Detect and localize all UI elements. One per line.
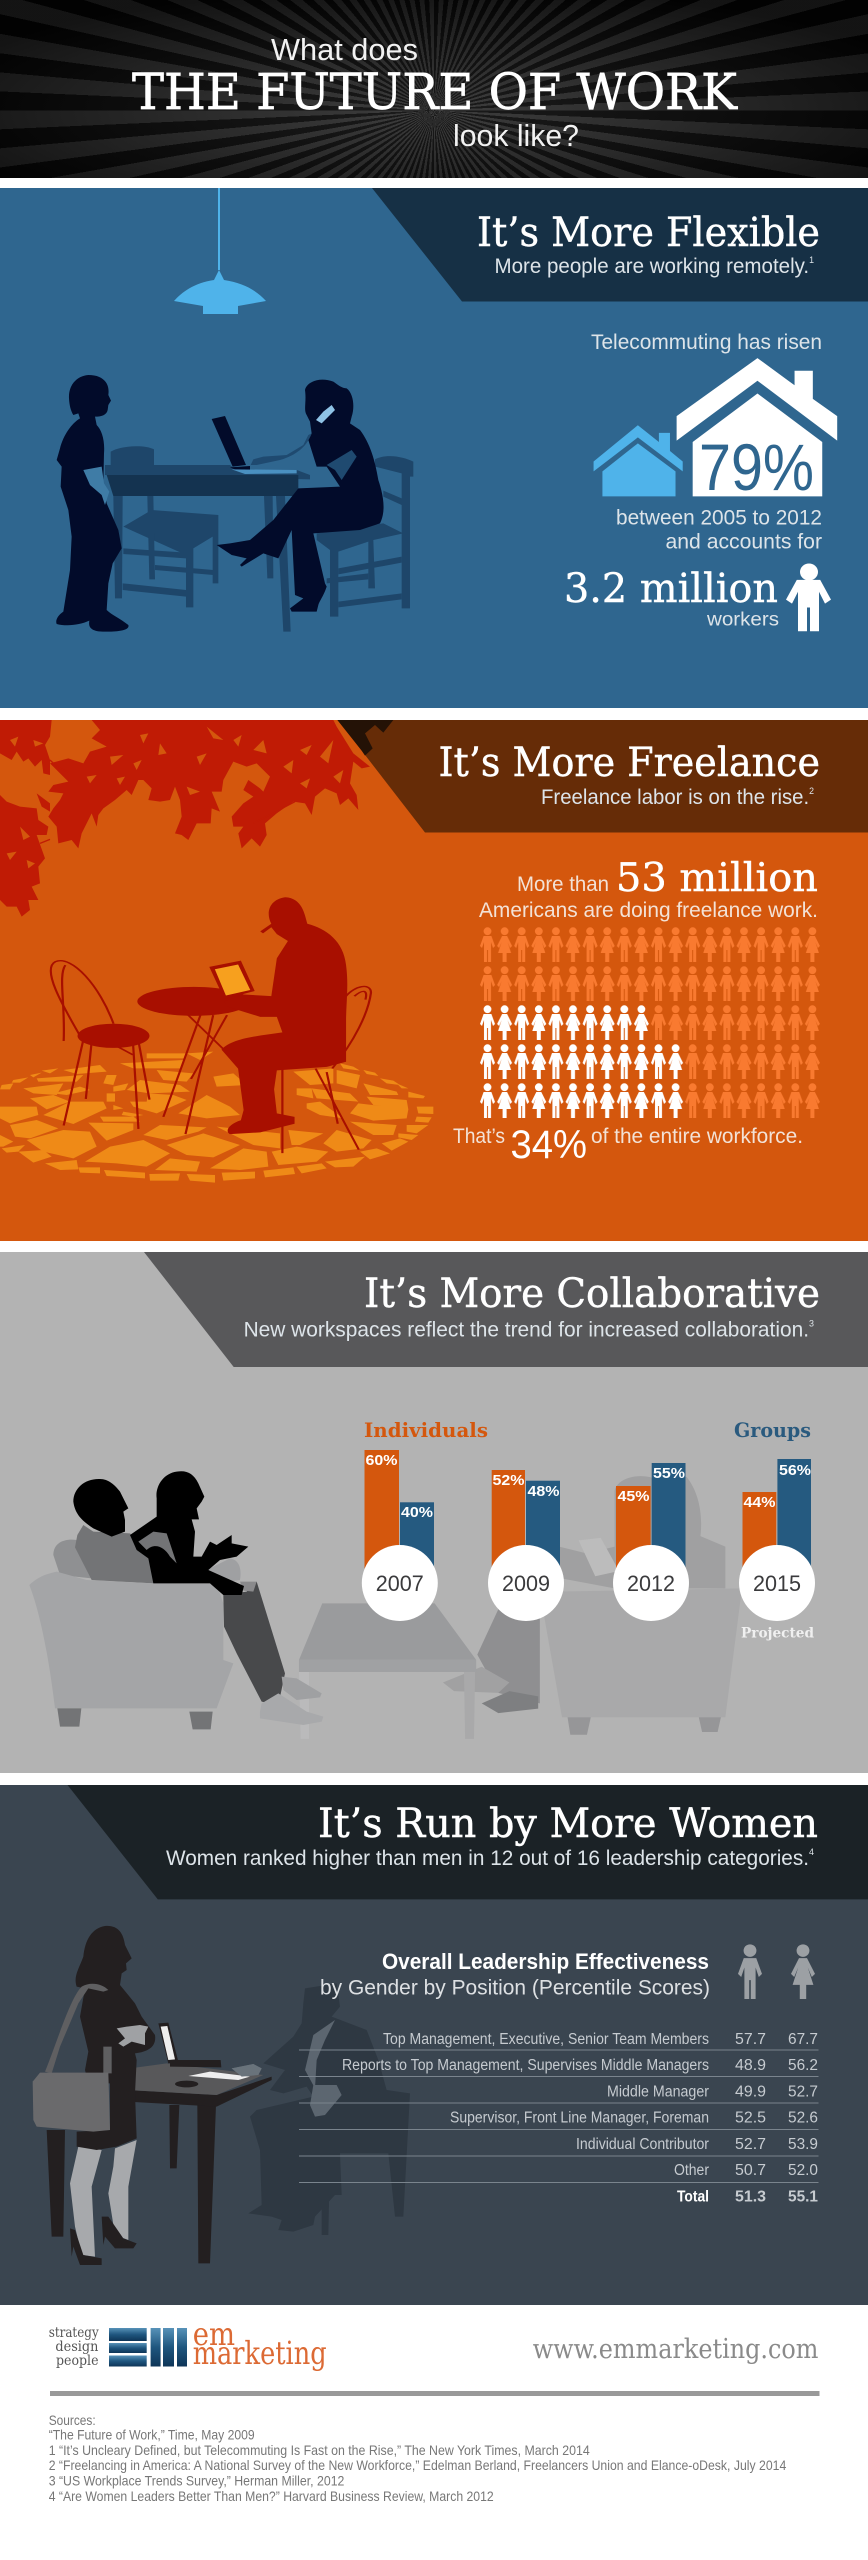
bars: 2015: 56% <box>779 1462 811 1479</box>
text: accounts for: and accounts for <box>666 530 822 554</box>
illustration: coffee table <box>299 1603 476 1739</box>
panel: run by more women <box>0 1785 868 2305</box>
panel: more freelance <box>0 720 868 1241</box>
chart: individuals vs groups <box>362 1418 815 1642</box>
bars: 2012: 55% <box>653 1465 685 1482</box>
sources list: 4 “Are Women Leaders Better Than Men?” Harvard Business Review, March 2012 <box>49 2488 494 2504</box>
text: thats: That’s <box>453 1125 505 1148</box>
banner: more freelance <box>337 720 868 832</box>
sources list: Sources: <box>49 2412 96 2428</box>
row: middle manager <box>607 2083 818 2100</box>
icon: large house with percentage <box>677 358 837 504</box>
row: individual contributor: 52.7 <box>735 2136 766 2153</box>
row: reports to top management: Reports to Top Management, Supervises Middle Managers <box>342 2057 709 2074</box>
row: other: Other <box>674 2162 709 2179</box>
row: total: 51.3 <box>735 2188 766 2206</box>
table subtitle: by Gender by Position (Percentile Scores) <box>320 1976 710 1999</box>
arm of standing person <box>83 467 109 505</box>
section subtitle: 4 <box>809 1847 814 1857</box>
icon: woman <box>791 1944 815 1999</box>
bars: 2009: 48% <box>528 1483 560 1500</box>
heading line: what does: What does <box>271 32 418 67</box>
row lines <box>299 2050 818 2183</box>
text: telecommuting has risen: Telecommuting has risen <box>591 331 822 354</box>
logo: em marketing <box>49 2315 327 2372</box>
main heading: THE FUTURE OF WORK <box>132 63 739 121</box>
illustration: seated man <box>232 1983 410 2235</box>
illustration: pendant lamp <box>174 188 266 314</box>
stat: 3.2 million: 3.2 million <box>564 566 778 612</box>
icon: worker figure <box>786 564 831 631</box>
bars: 2007: 60% <box>366 1452 398 1469</box>
section subtitle: 3 <box>809 1319 814 1329</box>
label: projected: Projected <box>741 1626 814 1642</box>
stat: 53 million: 53 million <box>616 856 818 901</box>
row: individual contributor: Individual Contributor <box>576 2136 709 2153</box>
bars: 2012 <box>613 1463 689 1621</box>
row: middle manager: 49.9 <box>735 2083 766 2100</box>
icon: man <box>738 1944 762 1999</box>
row: reports to top management: 56.2 <box>788 2057 818 2074</box>
row: top management: 57.7 <box>735 2031 766 2048</box>
row: other: 50.7 <box>735 2162 766 2179</box>
laptop <box>212 416 297 474</box>
illustration: standing woman with bag <box>33 1926 155 2265</box>
logo tagline: strategy <box>49 2325 99 2341</box>
bars: 2015 <box>739 1459 815 1621</box>
banner: more collaborative <box>144 1252 868 1367</box>
illustration: desk and laptop <box>47 2023 272 2263</box>
bars: 2015: 44% <box>744 1494 776 1511</box>
row: total: 55.1 <box>788 2188 818 2206</box>
bars: 2012: 45% <box>618 1488 650 1505</box>
section subtitle: New workspaces reflect the trend for increased collaboration. <box>244 1319 812 1342</box>
row: supervisor: 52.5 <box>735 2110 766 2126</box>
bars: 2009 <box>488 1470 564 1621</box>
row: other <box>674 2162 818 2179</box>
section subtitle: More people are working remotely. <box>494 255 816 278</box>
logo wordmark: em <box>193 2315 235 2353</box>
tree leaves over banner <box>337 720 393 756</box>
sources list: 1 “It’s Uncleary Defined, but Telecommuting Is Fast on the Rise,” The New York Times, March 2014 <box>49 2442 590 2458</box>
seated woman <box>217 380 384 612</box>
table: leadership effectiveness <box>299 1944 818 2206</box>
text: of the entire workforce: of the entire workforce. <box>591 1125 803 1148</box>
row: supervisor: Supervisor, Front Line Manager, Foreman <box>450 2110 709 2126</box>
illustration: cafe table and man with laptop <box>51 897 371 1153</box>
row: reports to top management: 48.9 <box>735 2057 766 2074</box>
panel: footer <box>49 2315 820 2504</box>
panel: header title <box>0 0 868 178</box>
row: top management: 67.7 <box>788 2031 818 2048</box>
illustration: patio <box>0 1052 433 1183</box>
illustration: tree leaves <box>0 720 370 917</box>
sources list: 3 “US Workplace Trends Survey,” Herman Miller, 2012 <box>49 2472 345 2488</box>
standing person <box>56 375 129 632</box>
text: workers: workers <box>706 610 779 630</box>
chairs and table legs <box>51 961 371 1153</box>
section title: It’s More Freelance <box>438 740 820 786</box>
row: individual contributor: 53.9 <box>788 2136 818 2153</box>
row: top management: Top Management, Executive, Senior Team Members <box>383 2031 709 2048</box>
illustration: faded person and armchair <box>443 1476 742 1735</box>
chairs <box>111 446 413 617</box>
bars: 2015: 2015 <box>753 1571 801 1596</box>
bars: 2009: 52% <box>492 1472 524 1489</box>
section subtitle: Freelance labor is on the rise. <box>541 786 818 809</box>
logo mark <box>109 2328 187 2366</box>
table title: Overall Leadership Effectiveness <box>382 1949 709 1974</box>
row: total <box>677 2188 818 2206</box>
pictogram: workforce share <box>480 927 822 1122</box>
section subtitle: 1 <box>809 255 814 265</box>
table <box>105 465 310 632</box>
illustration: couple on armchair <box>29 1471 323 1729</box>
row: middle manager: Middle Manager <box>607 2083 709 2100</box>
bars: 2009: 2009 <box>502 1571 550 1596</box>
text: americans: Americans are doing freelance work. <box>479 899 818 922</box>
bars: 2007 <box>362 1450 438 1621</box>
section subtitle: Women ranked higher than men in 12 out of 16 leadership categories. <box>166 1847 816 1870</box>
banner: more flexible <box>372 188 868 302</box>
row: supervisor: 52.6 <box>788 2110 818 2126</box>
section title: It’s More Collaborative <box>364 1271 820 1317</box>
bars: 2007: 2007 <box>376 1571 424 1596</box>
row: middle manager: 52.7 <box>788 2083 818 2100</box>
panel: more collaborative <box>0 1252 868 1773</box>
sources list <box>49 2412 786 2504</box>
divider <box>50 2391 820 2396</box>
website url: www.emmarketing.com <box>533 2334 818 2365</box>
text: between years: between 2005 to 2012 <box>616 506 822 530</box>
section title: It’s More Flexible <box>477 210 820 256</box>
logo tagline: design <box>55 2339 98 2355</box>
legend: groups: Groups <box>734 1418 811 1442</box>
sources list: 2 “Freelancing in America: A National Survey of the New Workforce,” Edelman Berland, Freelancers Union and Elance-oDesk, July 2014 <box>49 2457 786 2473</box>
phone <box>316 405 335 423</box>
text: more than: More than <box>517 873 609 896</box>
icon: small house <box>594 425 683 496</box>
logo tagline <box>49 2325 99 2369</box>
stat: 79 percent: 79% <box>699 430 814 504</box>
sources list: “The Future of Work,” Time, May 2009 <box>49 2426 255 2442</box>
bars: 2007: 40% <box>401 1504 433 1521</box>
panel: more flexible <box>0 188 868 708</box>
section subtitle: 2 <box>809 786 814 796</box>
illustration: people at table <box>56 375 413 632</box>
stat: 34 percent: 34% <box>510 1123 587 1167</box>
bars: 2012: 2012 <box>627 1571 675 1596</box>
row: individual contributor <box>576 2136 818 2153</box>
legend: individuals: Individuals <box>364 1418 488 1442</box>
section title: It’s Run by More Women <box>318 1801 818 1847</box>
row: total: Total <box>677 2188 709 2206</box>
logo: em marketing: marketing <box>193 2334 327 2372</box>
banner: more women <box>68 1785 868 1899</box>
logo tagline: people <box>56 2353 98 2369</box>
row: other: 52.0 <box>788 2162 818 2179</box>
heading line: look like: look like? <box>453 118 579 153</box>
